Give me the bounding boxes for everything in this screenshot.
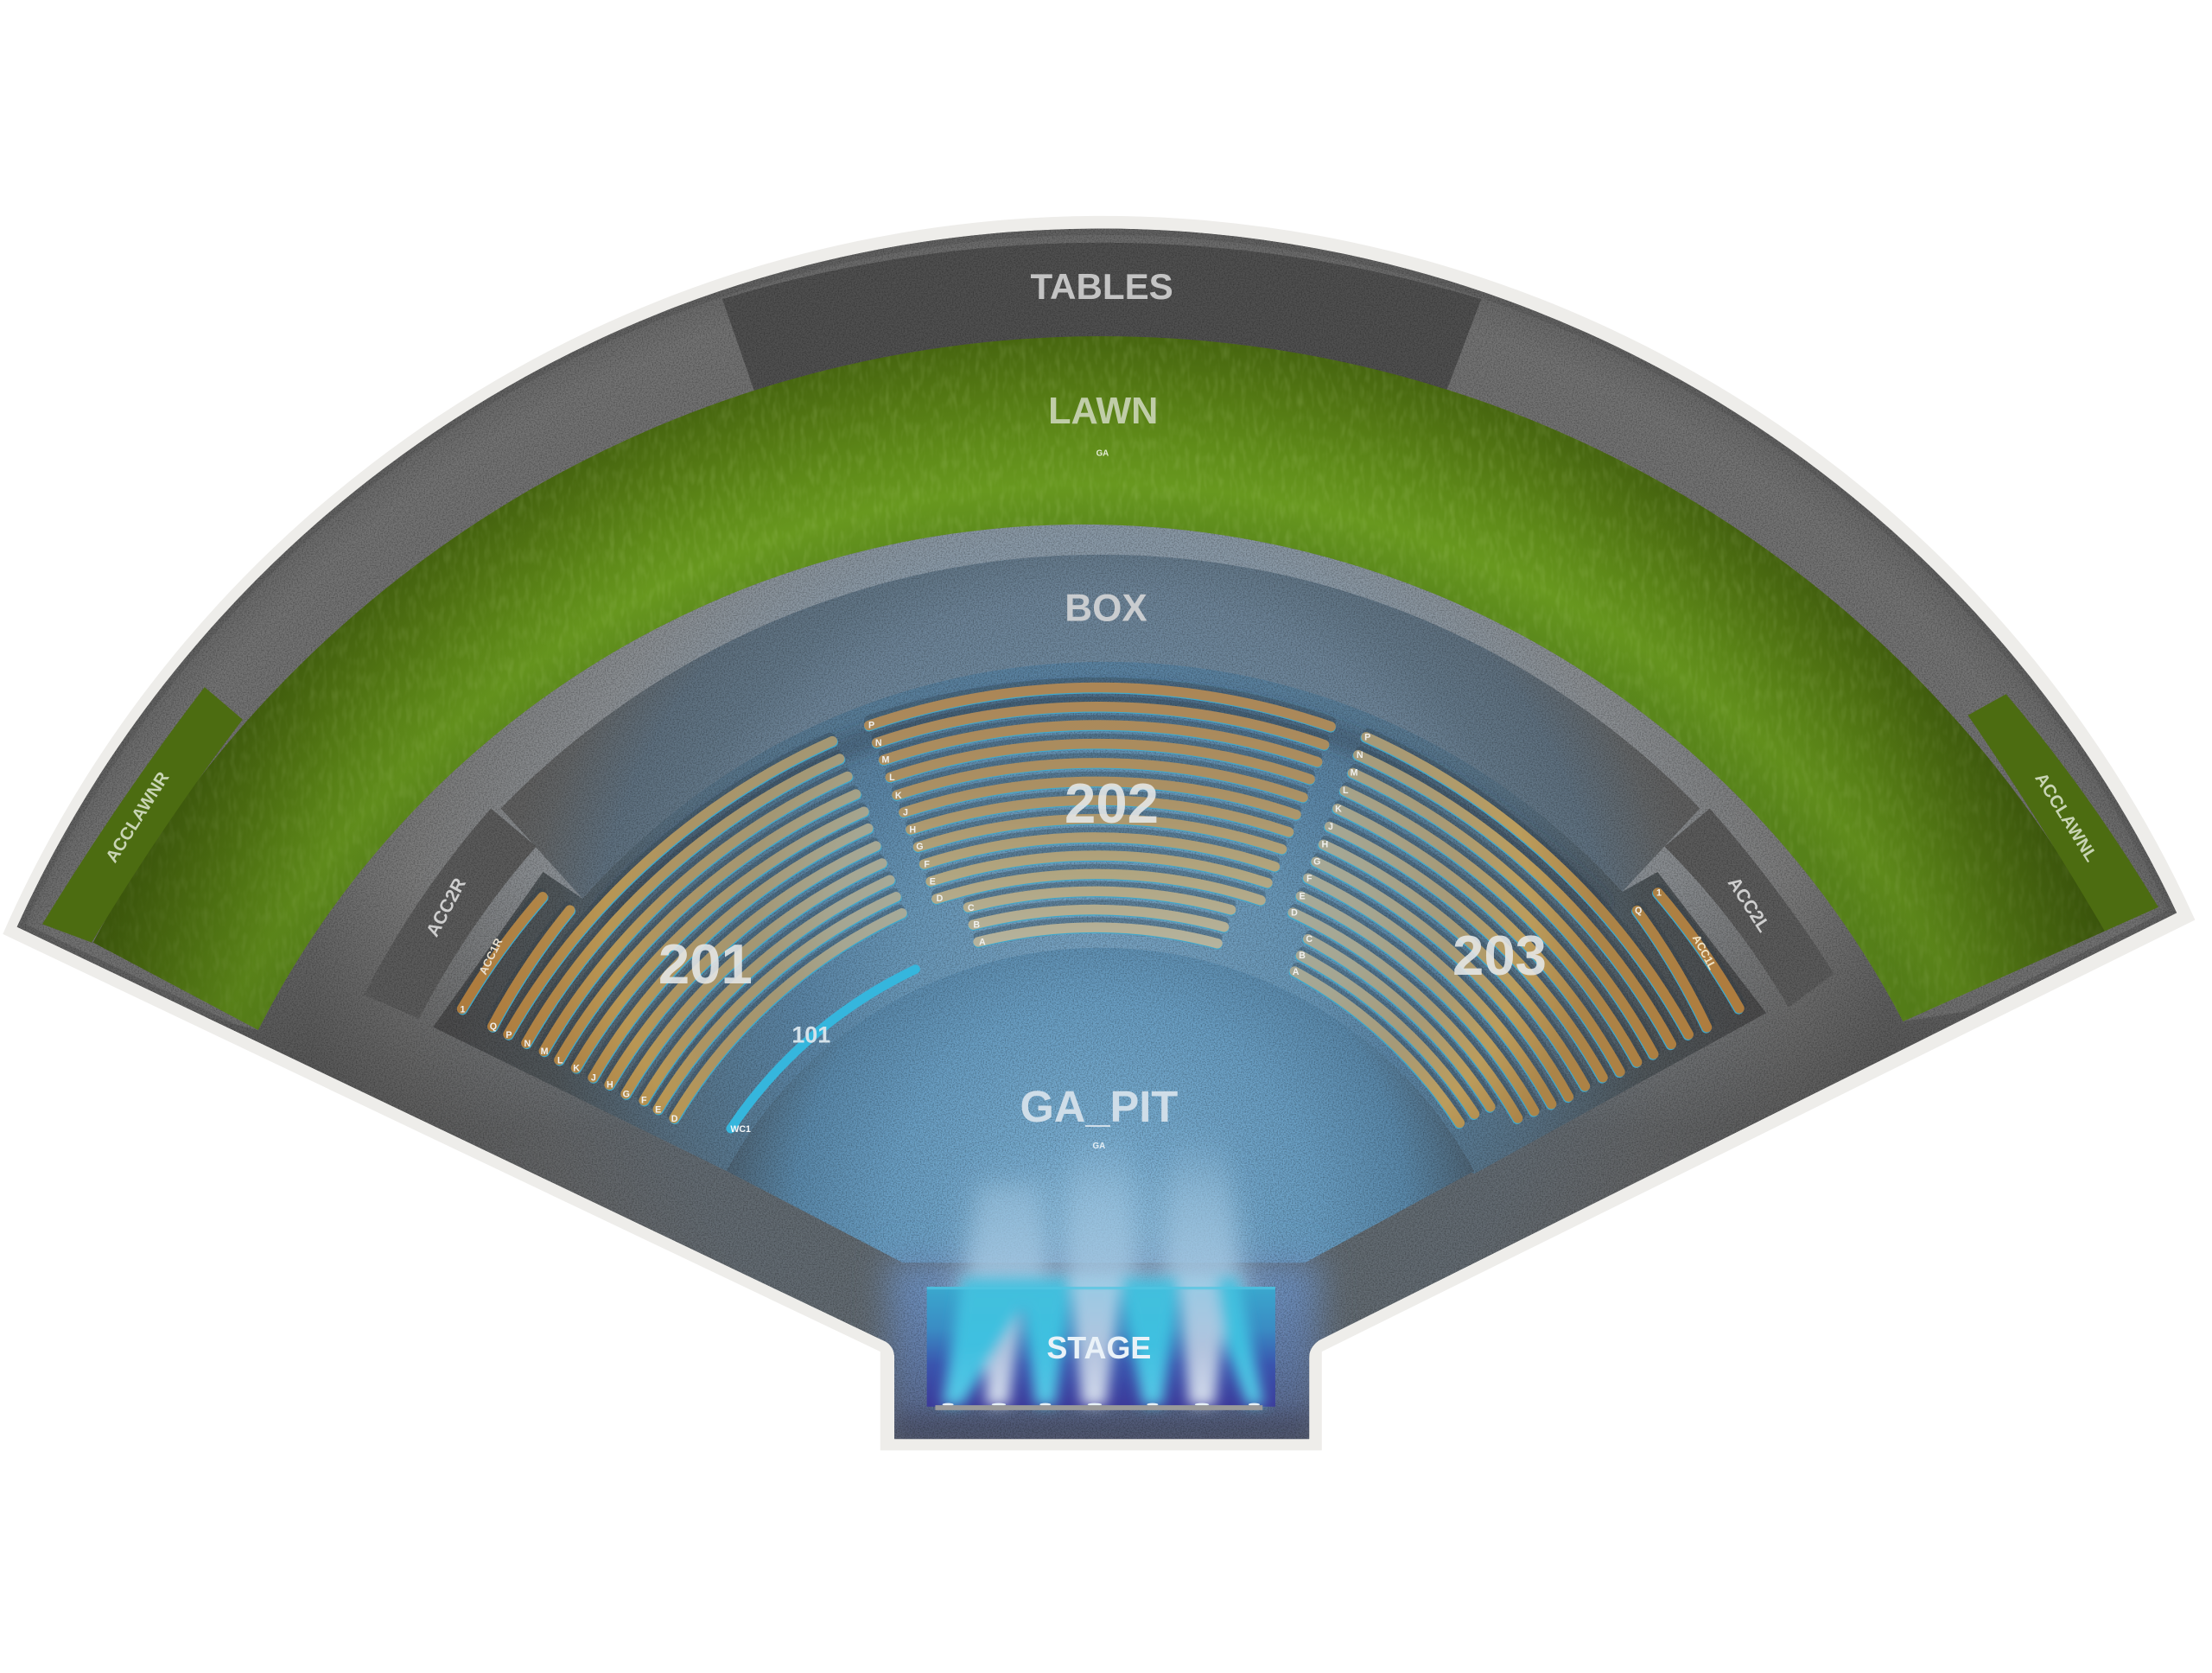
light bar — [935, 1405, 1262, 1410]
label: ACCLAWNR: ACCLAWNR — [103, 769, 173, 866]
stage label: STAGE — [1046, 1330, 1151, 1365]
stage top edge — [927, 1287, 1275, 1289]
row labels 202: P — [868, 720, 874, 730]
row labels 203: C — [1306, 934, 1313, 945]
row labels 202: N — [875, 738, 882, 748]
row labels 203: L — [1343, 786, 1349, 796]
panel: ACC2L — [1665, 809, 1834, 1008]
label: ACC1R: ACC1R — [476, 936, 505, 976]
row labels 201: G — [623, 1089, 630, 1099]
concrete texture — [0, 212, 2212, 1454]
label: section 101: 101 — [791, 1022, 830, 1048]
label: ACC1L: ACC1L — [1690, 932, 1719, 972]
inner concrete terrace — [206, 525, 1985, 1440]
row labels 203: J — [1328, 822, 1333, 832]
label: section 202: 202 — [1065, 772, 1159, 835]
light haze above stage — [948, 1129, 1255, 1312]
row labels 203: H — [1322, 840, 1328, 850]
panel: lawn — [85, 332, 2116, 1037]
row labels 201: F — [641, 1096, 647, 1106]
label: GA_PIT: GA_PIT — [1020, 1082, 1178, 1131]
row labels 203: F — [1306, 874, 1313, 884]
stage backdrop — [927, 1287, 1275, 1407]
panel: seating floor — [433, 662, 1766, 1174]
row labels 203: G — [1313, 856, 1320, 867]
row labels 201: J — [591, 1072, 596, 1083]
row labels 202: B — [973, 920, 980, 931]
label: BOX: BOX — [1065, 587, 1147, 629]
row labels 201: H — [607, 1080, 613, 1091]
row labels 203: M — [1351, 767, 1358, 778]
row labels 201: N — [524, 1039, 531, 1049]
row labels 202: K — [895, 791, 902, 801]
label: ACCLAWNL: ACCLAWNL — [2031, 770, 2101, 865]
row labels 202: C — [968, 903, 975, 913]
row labels 202: G — [916, 842, 924, 852]
row labels 203: N — [1357, 750, 1363, 760]
concrete venue base — [17, 229, 2177, 1439]
panel: ACCLAWNL — [1968, 694, 2158, 932]
label: ACC2R: ACC2R — [423, 875, 470, 940]
row labels 203: Q — [1635, 906, 1642, 916]
row labels 203: A — [1293, 967, 1300, 977]
row labels 201: M — [541, 1046, 549, 1057]
section 101 wheelchair row — [730, 970, 916, 1135]
row labels 201: E — [655, 1104, 661, 1115]
row labels 202: F — [924, 860, 930, 870]
row labels 203: 1 — [1656, 888, 1662, 899]
label: TABLES: TABLES — [1030, 266, 1173, 307]
panel: ACCLAWNR — [42, 687, 243, 943]
section 101 wheelchair row: WC1 — [730, 1124, 751, 1135]
label: pit GA: GA — [1093, 1142, 1105, 1151]
row labels 203: D — [1291, 908, 1298, 919]
row labels 203: E — [1299, 892, 1306, 902]
row labels 203 — [1291, 732, 1662, 977]
panel: box — [501, 555, 1700, 899]
light beams — [943, 1278, 1264, 1405]
row labels 201: K — [573, 1064, 580, 1074]
panel: ACC2R — [364, 809, 536, 1019]
row labels 202: E — [930, 876, 936, 887]
row labels 201: P — [505, 1030, 512, 1040]
row labels 202: J — [903, 808, 908, 818]
row labels 201 — [461, 1004, 678, 1124]
stage glow — [889, 1260, 1319, 1445]
floor back-edge shadow — [604, 696, 1601, 917]
row labels 201: 1 — [461, 1004, 466, 1015]
section 203 rows — [1291, 732, 1742, 1124]
section 202 rows — [868, 683, 1331, 947]
row labels 202 — [868, 720, 986, 947]
light fixtures — [943, 1403, 1260, 1406]
label: LAWN: LAWN — [1048, 391, 1158, 432]
row labels 202: L — [889, 773, 895, 783]
label: section 201: 201 — [658, 932, 753, 996]
row labels 202: D — [937, 894, 944, 904]
section 201 rows — [460, 737, 903, 1124]
row labels 201: Q — [490, 1021, 497, 1032]
row labels 202: M — [882, 755, 890, 766]
panel: tables — [722, 243, 1481, 392]
label: ACC2L: ACC2L — [1724, 874, 1774, 936]
venue outline — [3, 216, 2195, 1450]
row labels 201: D — [671, 1114, 678, 1124]
label: lawn GA: GA — [1096, 448, 1109, 458]
panel: GA pit — [727, 948, 1474, 1263]
label: section 203: 203 — [1452, 924, 1547, 987]
row labels 203: P — [1364, 732, 1370, 742]
stage — [927, 1129, 1275, 1410]
row labels 202: A — [979, 937, 986, 947]
row labels 203: B — [1299, 951, 1306, 961]
row labels 201: L — [557, 1056, 563, 1066]
row labels 203: K — [1335, 804, 1342, 814]
row labels 202: H — [909, 824, 916, 835]
